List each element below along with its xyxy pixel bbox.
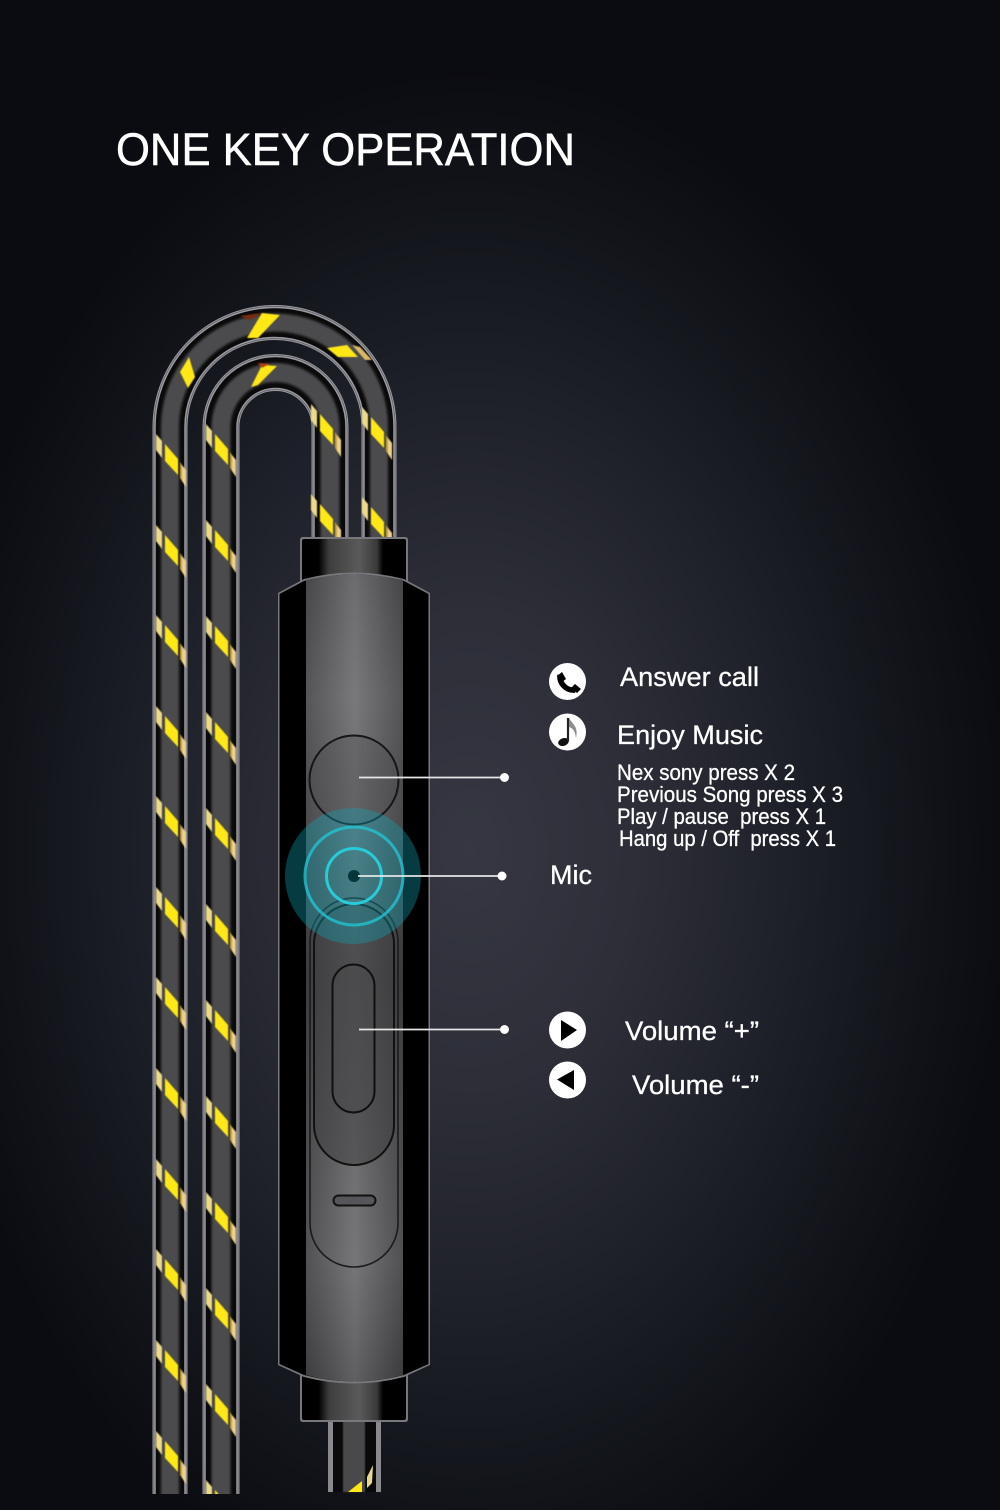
icon: phone: [549, 663, 586, 700]
icon: volume down arrow: [549, 1062, 586, 1098]
bottom collar: [300, 1370, 408, 1422]
inline control housing: [278, 572, 430, 1384]
leader line: volume: [359, 1025, 509, 1034]
music control instructions: Nex sony press X 2: [617, 760, 795, 785]
leader line: button: [359, 773, 509, 782]
top collar: [300, 537, 408, 590]
label: Answer call: Answer call: [620, 662, 759, 692]
yellow braid stripes: [156, 313, 392, 1510]
label: Enjoy Music: Enjoy Music: [617, 720, 763, 750]
label: Mic: Mic: [550, 860, 592, 890]
housing grey face: [306, 574, 403, 1382]
braided cable loop: [156, 313, 392, 1510]
cable strands: [170, 323, 379, 1500]
title: ONE KEY OPERATION: [116, 124, 575, 175]
leader line: mic: [358, 872, 506, 880]
music control instructions: Previous Song press X 3: [617, 782, 843, 807]
icon: music note: [549, 714, 586, 750]
label: Volume -: Volume “-”: [632, 1070, 759, 1100]
mic highlight rings: [285, 808, 421, 944]
lower cable: [328, 1420, 381, 1492]
small slot: [334, 1196, 376, 1206]
volume rocker: [314, 904, 394, 1165]
icon: volume up arrow: [549, 1012, 586, 1048]
housing shell: [278, 572, 430, 1384]
upper round button: [310, 736, 398, 824]
lower pill outline: [310, 898, 398, 1267]
label: Volume +: Volume “+”: [625, 1016, 759, 1046]
rocker slider: [332, 964, 374, 1112]
music control instructions: Play / pause press X 1: [617, 804, 826, 829]
music control instructions: Hang up / Off press X 1: [619, 826, 836, 851]
music control instructions: [617, 760, 843, 851]
